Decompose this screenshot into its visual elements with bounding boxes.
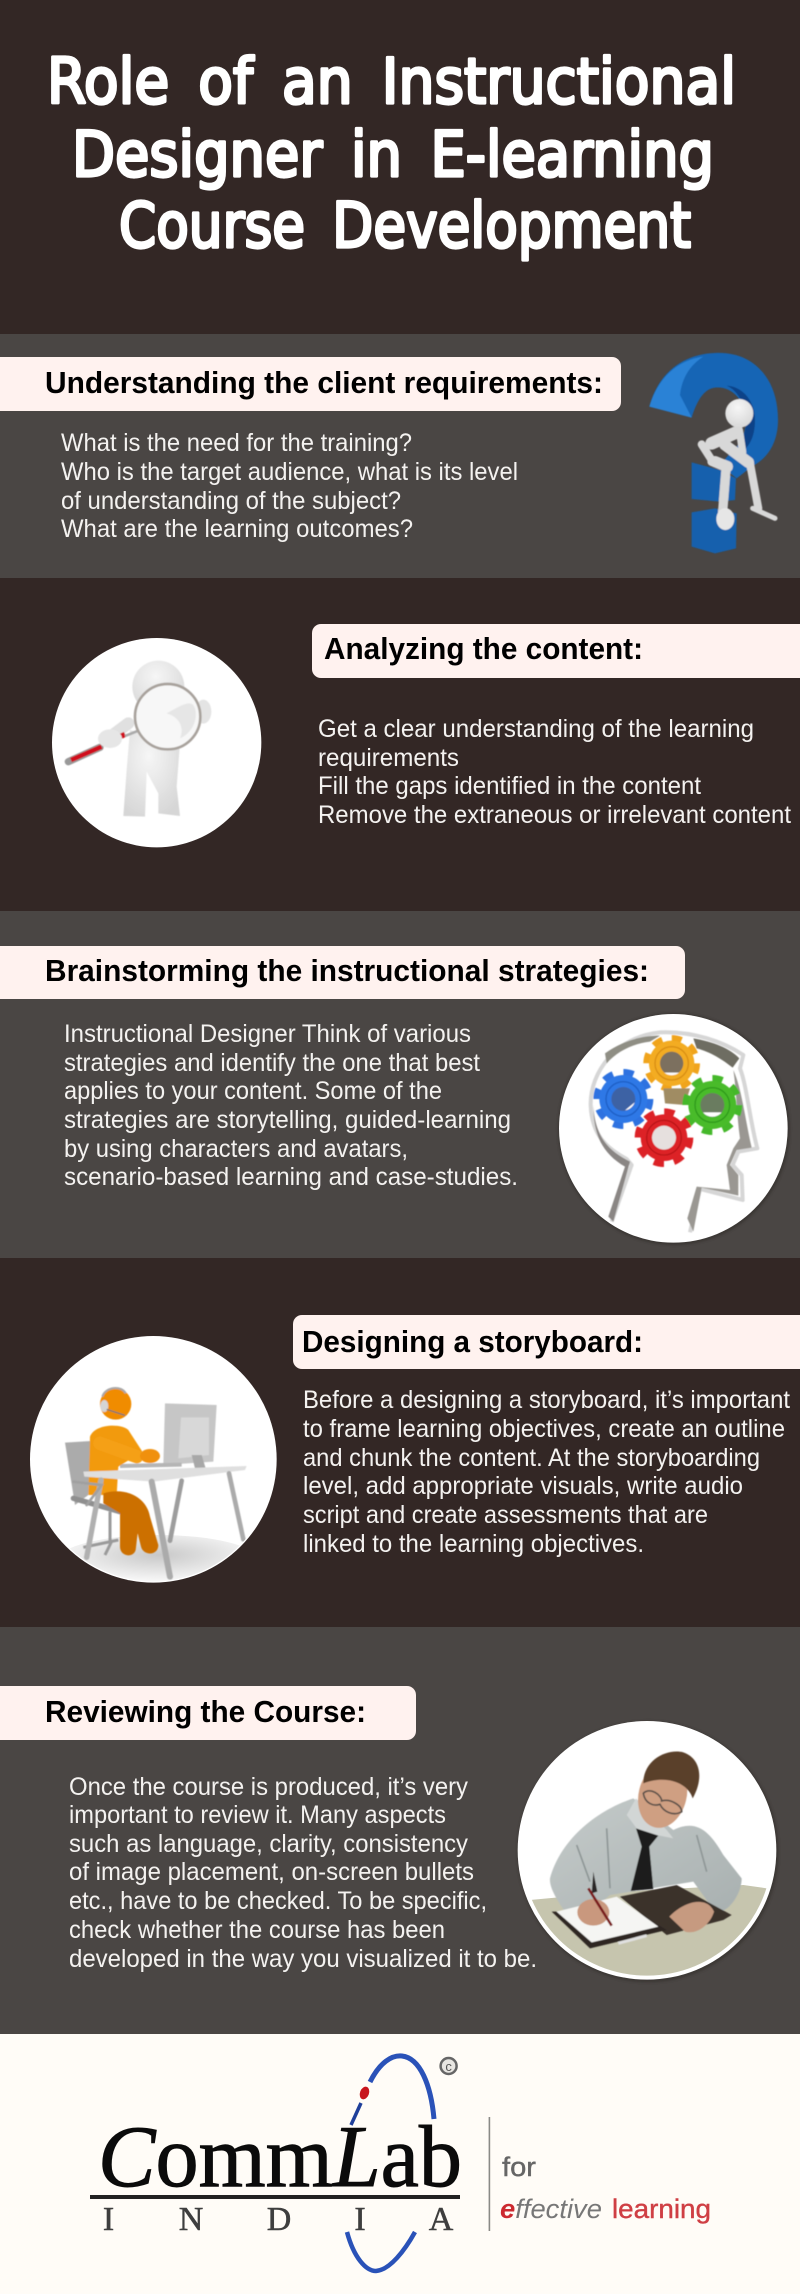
text block: etc., have to be checked. To be specific, — [69, 1887, 487, 1915]
text block: to frame learning objectives, create an outline — [303, 1415, 785, 1443]
icon: person at computer desk — [30, 1336, 277, 1585]
heading banner: Analyzing the content: — [324, 631, 643, 666]
heading banner — [0, 357, 621, 411]
text block: Once the course is produced, it’s very — [69, 1773, 468, 1801]
INDIA letters: N — [179, 2201, 203, 2238]
text block: level, add appropriate visuals, write audio — [303, 1472, 743, 1500]
heading banner: Understanding the client requirements: — [45, 365, 603, 400]
copyright mark — [441, 2058, 457, 2074]
panel: designing a storyboard — [30, 1315, 800, 1583]
text block: important to review it. Many aspects — [69, 1801, 446, 1829]
text block: Before a designing a storyboard, it’s important — [303, 1386, 790, 1414]
tagline: effective — [500, 2194, 602, 2224]
panel: title — [0, 0, 800, 334]
text block: check whether the course has been — [69, 1916, 445, 1944]
logo orbit arcs — [347, 2056, 434, 2271]
icon: head with gears — [558, 1013, 790, 1245]
text block: developed in the way you visualized it to be. — [69, 1945, 537, 1973]
text block — [318, 715, 791, 829]
CommLab wordmark: CommLab — [98, 2109, 462, 2206]
heading banner: Reviewing the Course: — [45, 1694, 366, 1729]
text block: and chunk the content. At the storyboarding — [303, 1444, 760, 1472]
heading banner — [312, 624, 800, 678]
logo red dot — [358, 2085, 371, 2101]
logo: CommLab India — [90, 2056, 711, 2271]
text block: Fill the gaps identified in the content — [318, 772, 701, 800]
icon: figure with magnifying glass — [52, 638, 261, 847]
icon: man writing at a desk — [517, 1721, 779, 1982]
text block — [303, 1386, 790, 1558]
heading banner — [0, 946, 685, 999]
icon: figure on question mark — [649, 353, 778, 553]
heading banner — [293, 1315, 800, 1369]
text block — [69, 1773, 537, 1973]
INDIA letters — [103, 2201, 454, 2238]
panel: understanding the client requirements — [0, 334, 800, 578]
text block — [61, 429, 518, 543]
panel: analyzing the content — [0, 578, 800, 911]
text block: strategies are storytelling, guided-learning — [64, 1106, 511, 1134]
title — [47, 45, 736, 262]
text block: requirements — [318, 744, 459, 772]
title: Designer in E-learning — [72, 118, 714, 191]
text block — [64, 1020, 518, 1191]
INDIA letters: I — [354, 2201, 366, 2238]
panel: brainstorming the instructional strategies — [0, 911, 800, 1258]
title: Role of an Instructional — [47, 45, 736, 118]
text block: Get a clear understanding of the learning — [318, 715, 754, 743]
INDIA letters: D — [267, 2201, 291, 2238]
text block: such as language, clarity, consistency — [69, 1830, 468, 1858]
text block: by using characters and avatars, — [64, 1135, 408, 1163]
text block: Instructional Designer Think of various — [64, 1020, 471, 1048]
text block: linked to the learning objectives. — [303, 1530, 644, 1558]
text block: of image placement, on-screen bullets — [69, 1858, 474, 1886]
text block: script and create assessments that are — [303, 1501, 708, 1529]
INDIA letters: I — [103, 2201, 114, 2238]
text block: of understanding of the subject? — [61, 487, 401, 515]
heading banner: Designing a storyboard: — [302, 1324, 643, 1359]
text block: applies to your content. Some of the — [64, 1077, 442, 1105]
text block: Who is the target audience, what is its level — [61, 458, 518, 486]
copyright mark: c — [445, 2059, 452, 2074]
heading banner — [0, 1686, 416, 1740]
text block: Remove the extraneous or irrelevant content — [318, 801, 791, 829]
panel: footer logo — [0, 2034, 800, 2294]
INDIA letters: A — [429, 2201, 454, 2238]
title: Course Development — [119, 189, 691, 262]
text block: scenario-based learning and case-studies. — [64, 1163, 518, 1191]
tagline: for — [502, 2152, 536, 2182]
text block: What are the learning outcomes? — [61, 515, 413, 543]
tagline: learning — [612, 2194, 711, 2224]
heading banner: Brainstorming the instructional strategies: — [45, 953, 649, 988]
tagline — [500, 2152, 711, 2224]
text block: strategies and identify the one that best — [64, 1049, 480, 1077]
panel: reviewing the course — [0, 1627, 800, 2034]
text block: What is the need for the training? — [61, 429, 412, 457]
